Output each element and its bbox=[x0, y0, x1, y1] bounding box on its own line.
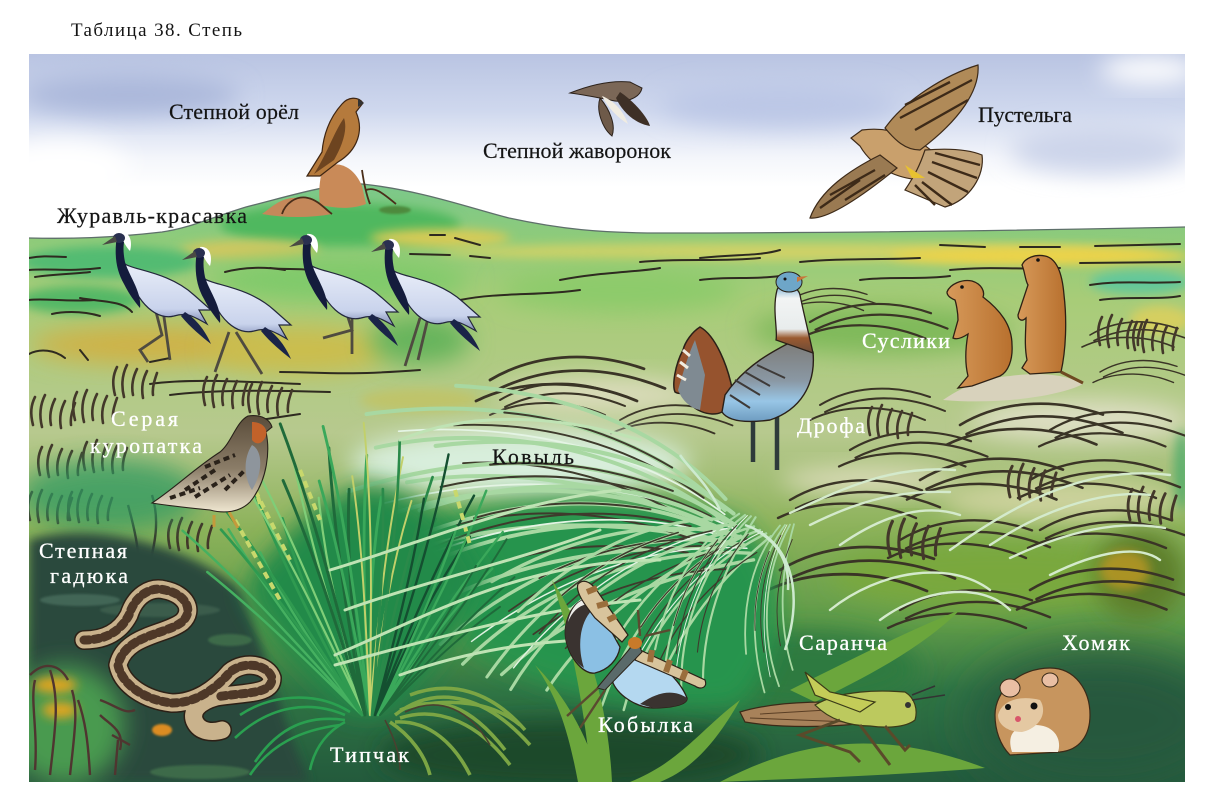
label: viper: Степная bbox=[39, 538, 127, 563]
crane legs bbox=[140, 308, 428, 374]
squirrel left bbox=[947, 281, 1012, 388]
squirrel right bbox=[1018, 255, 1066, 374]
crane 1 bbox=[102, 232, 211, 344]
tipchak grass tuft bbox=[181, 422, 516, 716]
label: steppe eagle: Степной орёл bbox=[169, 99, 299, 124]
label: bustard: Дрофа bbox=[797, 413, 865, 438]
tuft drooping blades bbox=[235, 688, 530, 775]
label: partridge: Серая bbox=[111, 406, 178, 431]
bottom-left dark grass bbox=[30, 666, 135, 775]
broad leaves foreground bbox=[535, 580, 985, 782]
label: partridge: куропатка bbox=[90, 433, 202, 458]
title: Таблица 38. Степь bbox=[71, 20, 242, 41]
label: feather grass: Ковыль bbox=[492, 444, 574, 469]
left field short dashes bbox=[28, 365, 292, 570]
label: crane: Журавль-красавка bbox=[57, 203, 247, 228]
tuft base bbox=[245, 485, 485, 715]
eagle bbox=[307, 98, 364, 176]
pale plumes over tuft bbox=[330, 419, 660, 675]
steppe viper bbox=[84, 589, 272, 731]
steppe ground bbox=[20, 180, 1216, 790]
label: ground squirrels: Суслики bbox=[862, 328, 950, 353]
label: locust: Саранча bbox=[799, 630, 887, 655]
label: viper: гадюка bbox=[50, 563, 128, 588]
crane 3 bbox=[289, 234, 398, 346]
label: grasshopper: Кобылка bbox=[598, 712, 693, 737]
crane 4 bbox=[371, 239, 480, 351]
label: tipchak: Типчак bbox=[330, 742, 409, 767]
label: hamster: Хомяк bbox=[1062, 630, 1130, 655]
long-horned grasshopper: kobylka bbox=[565, 581, 706, 728]
lark bbox=[570, 82, 650, 136]
crane 2 bbox=[182, 247, 291, 359]
locust bbox=[740, 672, 945, 765]
pale feather grass wisps right bbox=[790, 469, 1170, 620]
mound bbox=[943, 374, 1083, 401]
horizon line bbox=[29, 184, 1185, 238]
left dark ground bbox=[5, 533, 310, 785]
kestrel bbox=[810, 65, 982, 218]
hamster bbox=[995, 668, 1090, 755]
rock bbox=[262, 164, 411, 217]
ground squirrels bbox=[943, 255, 1083, 401]
feather grass plumes bbox=[346, 384, 795, 712]
mid-field tussocks bbox=[476, 289, 1192, 628]
grey partridge bbox=[152, 416, 272, 528]
feather grass base bbox=[420, 498, 779, 709]
distant dark grass strokes bbox=[29, 235, 1180, 420]
great bustard bbox=[674, 272, 813, 470]
sky bbox=[0, 54, 1200, 244]
left field teal patch bbox=[20, 459, 200, 531]
label: lark: Степной жаворонок bbox=[483, 138, 671, 163]
label: kestrel: Пустельга bbox=[978, 102, 1072, 127]
feather grass glow bbox=[350, 428, 690, 496]
